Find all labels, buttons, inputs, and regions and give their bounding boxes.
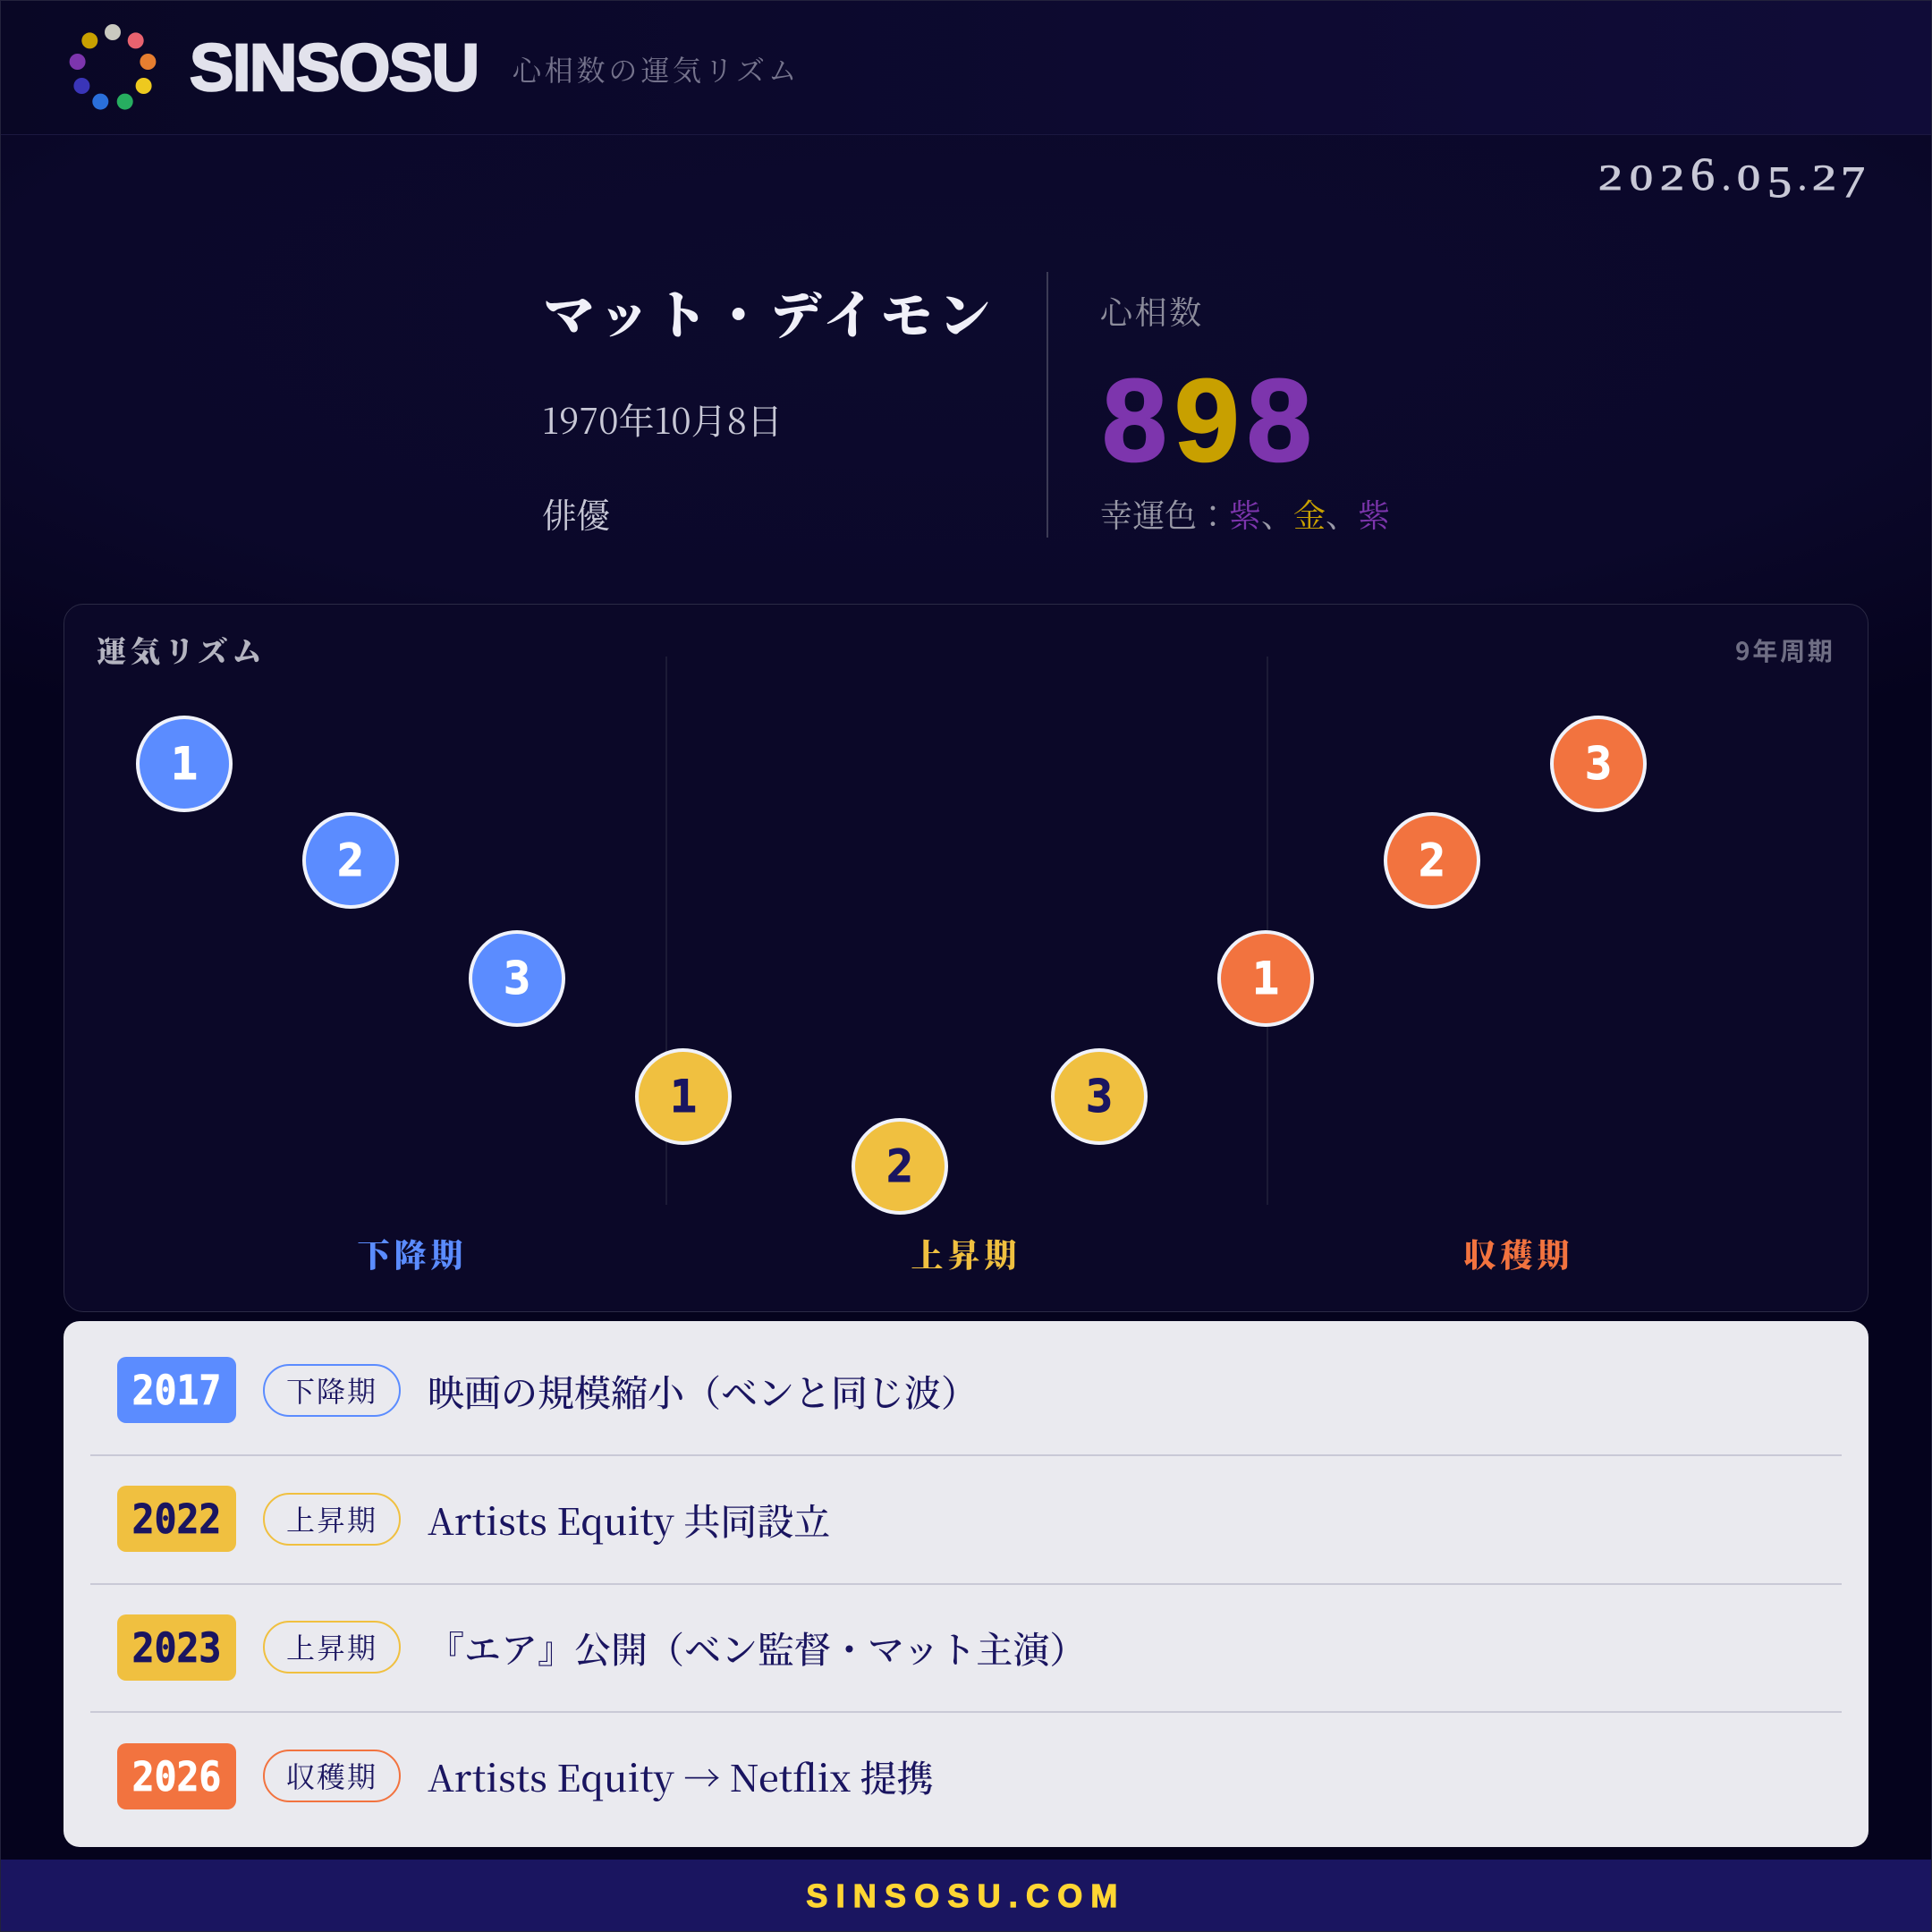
marker: rise 2: 2 bbox=[886, 1140, 913, 1192]
marker: harvest 3: 3 bbox=[1585, 738, 1612, 790]
date: . bbox=[1722, 157, 1731, 198]
year badge 2026 bbox=[117, 1743, 236, 1809]
period pill: 収穫期 bbox=[286, 1755, 377, 1796]
marker: decline 1: 1 bbox=[171, 738, 198, 790]
period pill bbox=[263, 1364, 401, 1417]
date: 7 bbox=[1841, 157, 1865, 207]
period label: harvest: 収穫期 bbox=[1463, 1231, 1574, 1276]
marker: rise 1 bbox=[635, 1048, 732, 1145]
event text: Artists Equity 共同設立 bbox=[428, 1493, 830, 1546]
date: 6 bbox=[1690, 149, 1715, 200]
row: 2022 bbox=[117, 1486, 830, 1552]
period pill bbox=[263, 1493, 401, 1546]
footer url: SINSOSU.COM bbox=[806, 1877, 1126, 1914]
period pill: 上昇期 bbox=[286, 1498, 377, 1539]
marker: decline 2: 2 bbox=[337, 835, 364, 886]
birth date: 1970年10月8日 bbox=[542, 394, 783, 445]
footer bar bbox=[0, 1860, 1932, 1932]
period pill bbox=[263, 1621, 401, 1674]
year badge 2022: 2022 bbox=[132, 1496, 221, 1543]
marker: rise 1: 1 bbox=[670, 1071, 697, 1123]
logo wordmark: SINSOSU bbox=[190, 30, 479, 105]
date bbox=[1598, 149, 1865, 207]
marker: rise 3: 3 bbox=[1086, 1071, 1113, 1123]
marker: harvest 3 bbox=[1550, 716, 1647, 812]
occupation: 俳優 bbox=[542, 488, 610, 538]
cycle note: 9年周期 bbox=[1735, 632, 1835, 668]
marker: harvest 2: 2 bbox=[1419, 835, 1445, 886]
marker: harvest 1: 1 bbox=[1252, 953, 1279, 1004]
period label: decline: 下降期 bbox=[357, 1231, 467, 1276]
year badge 2017 bbox=[117, 1357, 236, 1423]
date: . bbox=[1798, 157, 1807, 198]
date: 0 bbox=[1737, 157, 1760, 198]
date: 2 bbox=[1812, 157, 1836, 198]
marker: decline 3 bbox=[469, 930, 565, 1027]
panel: timeline list bbox=[64, 1321, 1868, 1847]
panel: fortune rhythm chart bbox=[64, 604, 1868, 1312]
icon: nine-dot colour ring logo bbox=[70, 24, 156, 110]
event text: Artists Equity → Netflix 提携 bbox=[428, 1750, 934, 1802]
marker: harvest 2 bbox=[1384, 812, 1480, 909]
row: 2017 bbox=[117, 1357, 978, 1423]
heart-phase number block bbox=[1100, 288, 1390, 537]
date: 0 bbox=[1630, 157, 1653, 198]
person info block bbox=[542, 274, 996, 538]
header tagline: 心相数の運気リズム bbox=[513, 48, 801, 89]
year badge 2023: 2023 bbox=[132, 1624, 221, 1672]
header bar bbox=[0, 0, 1932, 135]
period pill bbox=[263, 1750, 401, 1802]
row: 2026 bbox=[117, 1743, 934, 1809]
period label: rise: 上昇期 bbox=[911, 1231, 1021, 1276]
marker: rise 2 bbox=[852, 1118, 948, 1215]
year badge 2026: 2026 bbox=[132, 1753, 221, 1801]
chart heading: 運気リズム bbox=[97, 629, 266, 671]
label: 心相数: 心相数 bbox=[1100, 288, 1204, 334]
period pill: 上昇期 bbox=[286, 1626, 377, 1667]
year badge 2022 bbox=[117, 1486, 236, 1552]
event text: 映画の規模縮小（ベンと同じ波） bbox=[428, 1364, 978, 1417]
marker: rise 3 bbox=[1051, 1048, 1148, 1145]
marker: decline 2 bbox=[302, 812, 399, 909]
year badge 2017: 2017 bbox=[132, 1367, 221, 1414]
person name: マット・デイモン bbox=[543, 274, 996, 349]
marker: harvest 1 bbox=[1217, 930, 1314, 1027]
date: 2 bbox=[1598, 157, 1623, 198]
period pill: 下降期 bbox=[286, 1369, 377, 1411]
number 898: 898 bbox=[1102, 354, 1319, 486]
row: 2023 bbox=[117, 1614, 1086, 1681]
lucky colours: 幸運色：紫、金、紫 bbox=[1100, 491, 1390, 537]
event text: 『エア』公開（ベン監督・マット主演） bbox=[428, 1621, 1086, 1674]
marker: decline 1 bbox=[136, 716, 233, 812]
date: 2 bbox=[1660, 157, 1684, 198]
year badge 2023 bbox=[117, 1614, 236, 1681]
marker: decline 3: 3 bbox=[504, 953, 530, 1004]
date: 5 bbox=[1767, 157, 1792, 207]
